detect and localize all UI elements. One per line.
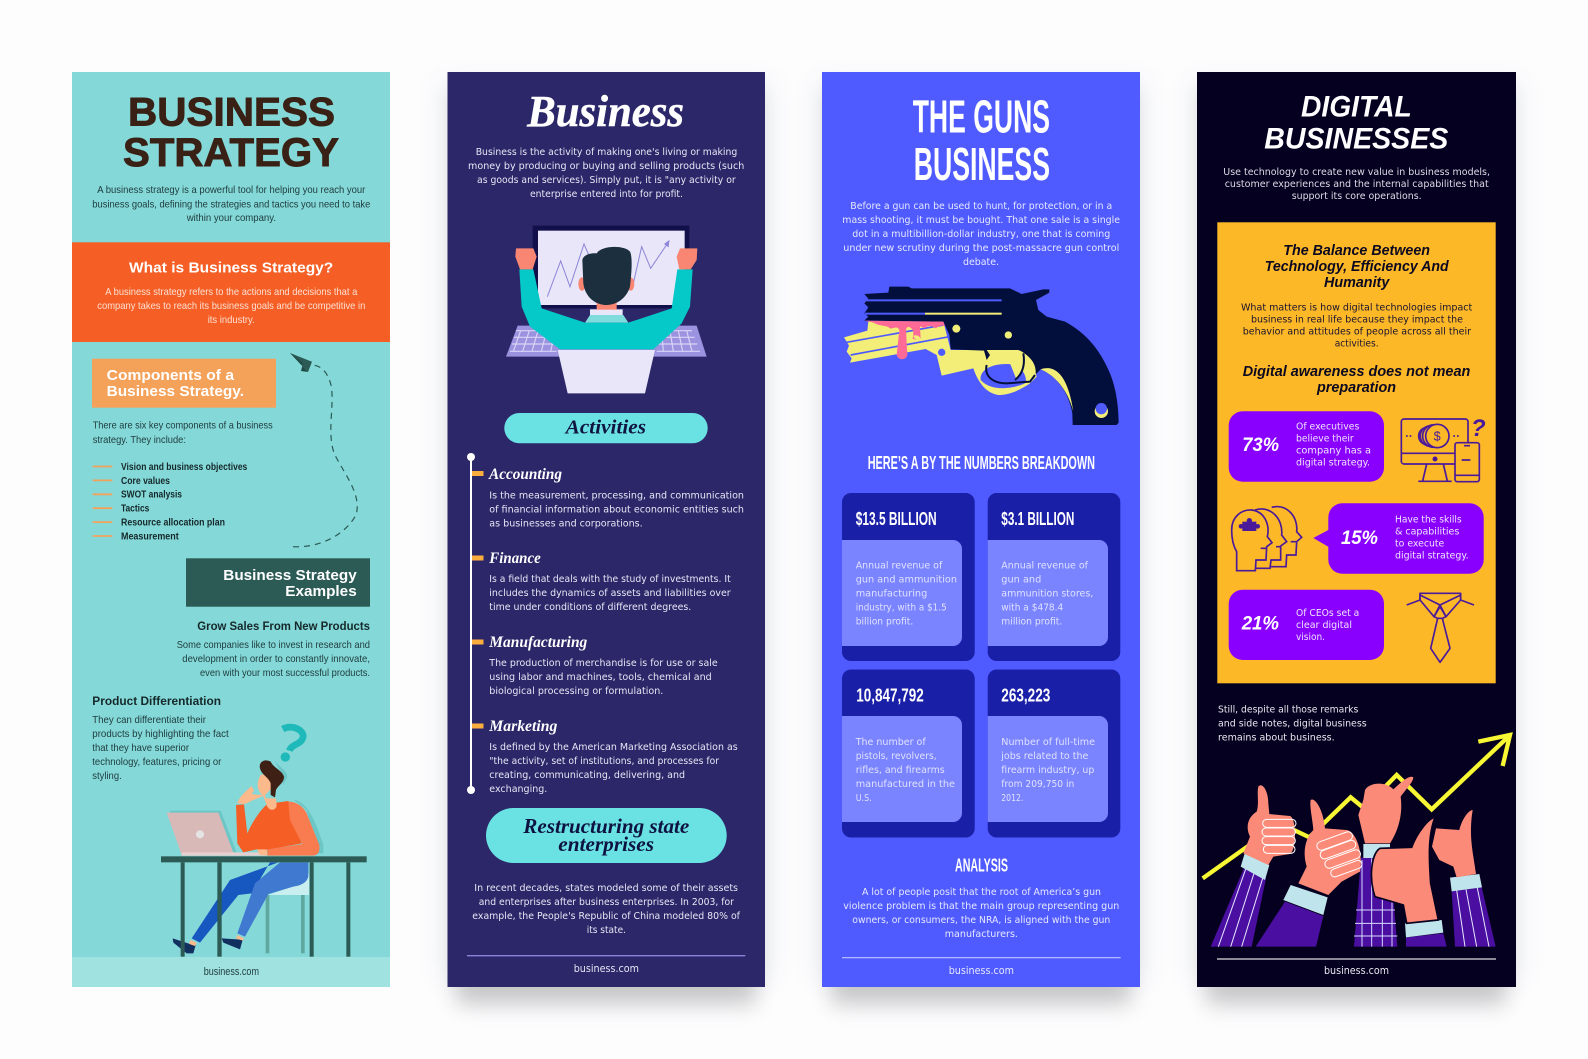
stat card: $3.1 billion: Annual revenue of <box>1001 560 1088 572</box>
intro text: money by producing or buying and selling products (such <box>468 161 744 172</box>
activity: marketing: exchanging. <box>489 784 547 795</box>
intro text <box>468 147 744 200</box>
intro text: under new scrutiny during the post-massacre gun control <box>843 243 1119 254</box>
callout: 73%: 73% <box>1242 435 1279 456</box>
block: product differentiation: technology, features, pricing or <box>92 756 222 768</box>
stat card: 263,223: Number of full-time <box>1001 737 1095 748</box>
closing text <box>1218 705 1367 744</box>
stat card: $3.1 billion: gun and <box>1001 574 1041 586</box>
title: Business <box>526 87 684 136</box>
icon: monitor, coin and phone: $ <box>1434 430 1441 444</box>
analysis text: A lot of people posit that the root of America’s gun <box>862 887 1101 898</box>
block: grow sales: Grow Sales From New Products <box>197 619 370 633</box>
stat card: $13.5 billion: $13.5 BILLION <box>856 509 937 529</box>
callout: 73% <box>1229 411 1384 482</box>
stat card: $13.5 billion: billion profit. <box>856 616 913 628</box>
panel: guns business <box>822 72 1140 987</box>
callout: 21%: vision. <box>1296 632 1325 643</box>
heading: digital awareness: Digital awareness does not mean <box>1243 364 1470 380</box>
block: product differentiation: that they have superior <box>92 742 189 754</box>
intro text <box>92 184 370 224</box>
illustration: man at monitor <box>506 226 707 393</box>
heading: examples <box>186 558 370 607</box>
activity: manufacturing: using labor and machines, tools, chemical and <box>489 672 712 683</box>
activity: accounting: of financial information about economic entities such <box>489 504 744 516</box>
illustration: thumbs up and rising arrow <box>1203 735 1510 947</box>
callout: 15%: digital strategy. <box>1395 550 1469 561</box>
stat card: $13.5 billion: industry, with a $1.5 <box>856 602 947 614</box>
icon: monitor, coin and phone <box>1401 415 1486 482</box>
analysis text <box>843 887 1119 940</box>
list of components: Resource allocation plan <box>121 518 225 528</box>
heading: examples: Examples <box>285 583 357 600</box>
callout: 21% <box>1229 590 1384 660</box>
panel: yellow card <box>1217 222 1496 683</box>
intro text: debate. <box>963 257 999 268</box>
stat card: 10,847,792: U.S. <box>856 793 872 804</box>
callout: 15% <box>1313 503 1484 574</box>
stat card: $3.1 billion: with a $478.4 <box>1001 602 1063 614</box>
callout: 21%: clear digital <box>1296 620 1352 631</box>
pill: activities: Activities <box>564 416 646 438</box>
block: product differentiation: products by highlighting the fact <box>92 728 229 740</box>
list of components: Vision and business objectives <box>121 462 248 473</box>
heading: balance: Technology, Efficiency And <box>1265 259 1450 275</box>
panel: digital businesses <box>1197 72 1516 987</box>
callout: 15%: Have the skills <box>1395 514 1462 525</box>
activity: marketing: Marketing <box>488 718 558 735</box>
activity: marketing <box>488 718 738 795</box>
block: product differentiation: They can differentiate their <box>92 714 206 726</box>
stat card: $3.1 billion <box>988 493 1120 661</box>
heading: components: Components of a <box>107 367 235 384</box>
subheading: HERE’S A BY THE NUMBERS BREAKDOWN <box>868 453 1095 473</box>
pill: activities <box>504 413 708 443</box>
intro text: dot in a multibillion-dollar industry, one that is coming <box>852 229 1110 240</box>
callout: 15%: to execute <box>1395 538 1444 549</box>
title: THE GUNS <box>913 91 1050 143</box>
intro text: within your company. <box>186 212 276 224</box>
stat card: 263,223: 2012. <box>1001 793 1023 804</box>
stat card: 10,847,792: rifles, and firearms <box>856 765 945 776</box>
intro text <box>842 201 1120 268</box>
body text: activities. <box>1335 339 1379 350</box>
footer: business.com <box>574 963 639 975</box>
stat card: $3.1 billion: $3.1 BILLION <box>1001 509 1074 529</box>
title: BUSINESSES <box>1264 122 1448 155</box>
closing text: and enterprises after business enterprises. In 2003, for <box>479 897 735 908</box>
band: what is business strategy: company takes to reach its business goals and be competitive in <box>97 300 365 312</box>
list of components: Core values <box>121 476 170 487</box>
heading: digital awareness <box>1243 364 1470 396</box>
analysis text: violence problem is that the main group representing gun <box>843 901 1119 912</box>
pill: restructuring state enterprises: Restructuring state <box>522 814 689 838</box>
components text: strategy. They include: <box>93 434 186 446</box>
activity: accounting: Accounting <box>488 466 562 483</box>
icon: paper plane with dashed trail <box>290 353 357 547</box>
intro text: Use technology to create new value in business models, <box>1223 167 1490 178</box>
activity: accounting: Is the measurement, processing, and communication <box>489 490 744 502</box>
body text: behavior and attitudes of people across all their <box>1243 327 1472 338</box>
band: what is business strategy <box>72 242 390 342</box>
stat card: 263,223: jobs related to the <box>1000 751 1088 762</box>
intro text: business goals, defining the strategies and tactics you need to take <box>92 198 370 210</box>
body text <box>1241 303 1472 350</box>
body text: What matters is how digital technologies impact <box>1241 303 1472 314</box>
title <box>1264 91 1448 155</box>
title: BUSINESS <box>128 91 335 135</box>
stat card: 10,847,792: pistols, revolvers, <box>856 751 937 762</box>
closing text: remains about business. <box>1218 733 1335 744</box>
closing text: example, the People's Republic of China modeled 80% of <box>472 911 740 922</box>
closing text: and side notes, digital business <box>1218 719 1367 730</box>
body text: business in real life because they impact the <box>1251 315 1463 326</box>
intro text: support its core operations. <box>1292 191 1422 202</box>
callout: 73%: believe their <box>1296 433 1355 444</box>
heading: components <box>92 359 276 408</box>
stat card: 263,223 <box>988 670 1120 838</box>
closing text: its state. <box>587 925 626 936</box>
intro text: A business strategy is a powerful tool for helping you reach your <box>97 184 366 196</box>
closing text <box>472 883 740 936</box>
closing text: Still, despite all those remarks <box>1218 705 1358 716</box>
title <box>913 91 1050 190</box>
intro text: as goods and services). Simply put, it is "any activity or <box>477 175 737 186</box>
pill: restructuring state enterprises <box>486 808 727 863</box>
icon: monitor, coin and phone: ? <box>1471 415 1486 442</box>
footer: business.com <box>1324 965 1389 977</box>
stat card: 10,847,792: 10,847,792 <box>856 685 924 705</box>
activity: accounting <box>488 466 744 530</box>
callout: 73%: Of executives <box>1296 421 1359 432</box>
stat card: $13.5 billion: Annual revenue of <box>856 560 943 572</box>
block: product differentiation: Product Differentiation <box>92 694 221 708</box>
list of components <box>93 462 248 542</box>
callout: 73%: company has a <box>1296 445 1371 456</box>
block: grow sales <box>177 619 370 679</box>
intro text: Before a gun can be used to hunt, for protection, or in a <box>850 201 1112 212</box>
timeline <box>467 453 484 794</box>
block: product differentiation: styling. <box>92 770 122 782</box>
stat card: 263,223: from 209,750 in <box>1001 779 1074 790</box>
components text: There are six key components of a business <box>93 420 273 432</box>
activity: finance: Finance <box>488 550 541 567</box>
callout: 21%: 21% <box>1241 614 1279 635</box>
intro text: customer experiences and the internal capabilities that <box>1225 179 1489 190</box>
intro text: enterprise entered into for profit. <box>530 189 683 200</box>
analysis text: owners, or consumers, the NRA, is aligned with the gun <box>852 915 1110 926</box>
panel: business strategy <box>72 72 390 987</box>
footer: business.com <box>204 966 259 978</box>
stat card: 10,847,792: manufactured in the <box>856 779 955 790</box>
callout: 21%: Of CEOs set a <box>1296 608 1359 619</box>
activity: marketing: Is defined by the American Marketing Association as <box>489 742 738 753</box>
components text <box>93 420 273 446</box>
activity: manufacturing: biological processing or formulation. <box>489 686 663 697</box>
block: grow sales: Some companies like to invest in research and <box>177 639 370 651</box>
title: DIGITAL <box>1301 91 1412 124</box>
activity: marketing: creating, communicating, delivering, and <box>489 770 685 781</box>
illustration: thinking man at desk <box>161 727 367 957</box>
heading: examples: Business Strategy <box>223 567 357 584</box>
callout: 73%: digital strategy. <box>1296 457 1370 468</box>
title <box>123 91 339 175</box>
activity: manufacturing <box>488 634 718 697</box>
title: BUSINESS <box>914 138 1050 190</box>
panel: business <box>448 72 765 987</box>
stat card: 10,847,792 <box>842 670 975 838</box>
activity: finance: Is a field that deals with the study of investments. It <box>489 574 731 585</box>
callout: 15%: & capabilities <box>1395 526 1459 537</box>
stat card: $3.1 billion: million profit. <box>1001 616 1062 628</box>
activity: finance <box>488 550 732 613</box>
band: what is business strategy: What is Business Strategy? <box>129 259 333 276</box>
activity: accounting: as businesses and corporations. <box>489 518 643 530</box>
stat card: 263,223: 263,223 <box>1001 685 1050 705</box>
activity: manufacturing: The production of merchandise is for use or sale <box>488 658 718 669</box>
block: grow sales: development in order to constantly innovate, <box>182 653 370 665</box>
list of components: SWOT analysis <box>121 490 182 501</box>
callout: 15%: 15% <box>1341 528 1378 549</box>
block: grow sales: even with your most successful products. <box>200 667 370 679</box>
stat card: $13.5 billion: gun and ammunition <box>856 574 957 586</box>
activity: marketing: "the activity, set of institutions, and processes for <box>489 756 720 767</box>
band: what is business strategy: A business strategy refers to the actions and decisions that a <box>105 286 357 298</box>
intro text: mass shooting, it must be bought. That one sale is a single <box>842 215 1120 226</box>
stat card: $3.1 billion: ammunition stores, <box>1001 588 1093 600</box>
heading: balance <box>1265 243 1450 291</box>
heading: balance: Humanity <box>1324 275 1390 291</box>
list of components: Measurement <box>121 531 179 542</box>
activity: finance: includes the dynamics of assets and liabilities over <box>489 588 732 599</box>
icon: heads with puzzle piece <box>1232 507 1302 571</box>
pill: restructuring state enterprises: enterprises <box>558 832 654 856</box>
footer: business.com <box>949 965 1014 977</box>
icon: tie and collar <box>1407 593 1474 662</box>
stat card: $13.5 billion: manufacturing <box>856 588 927 600</box>
analysis text: manufacturers. <box>945 929 1018 940</box>
stat card: 263,223: firearm industry, up <box>1001 765 1094 776</box>
heading: components: Business Strategy. <box>107 383 244 400</box>
activity: manufacturing: Manufacturing <box>488 634 588 651</box>
intro text <box>1223 167 1490 202</box>
heading: balance: The Balance Between <box>1283 243 1430 259</box>
intro text: Business is the activity of making one's living or making <box>476 147 737 158</box>
heading: digital awareness: preparation <box>1316 380 1396 396</box>
band: what is business strategy: its industry. <box>208 314 255 326</box>
stat card: 10,847,792: The number of <box>855 737 926 748</box>
title: STRATEGY <box>123 131 339 175</box>
stat card: $13.5 billion <box>842 493 975 661</box>
closing text: In recent decades, states modeled some of their assets <box>474 883 738 894</box>
activity: finance: time under conditions of different degrees. <box>489 602 691 613</box>
heading: analysis: ANALYSIS <box>955 856 1008 876</box>
block: product differentiation <box>92 694 229 782</box>
illustration: revolver <box>844 287 1119 425</box>
list of components: Tactics <box>121 504 150 515</box>
